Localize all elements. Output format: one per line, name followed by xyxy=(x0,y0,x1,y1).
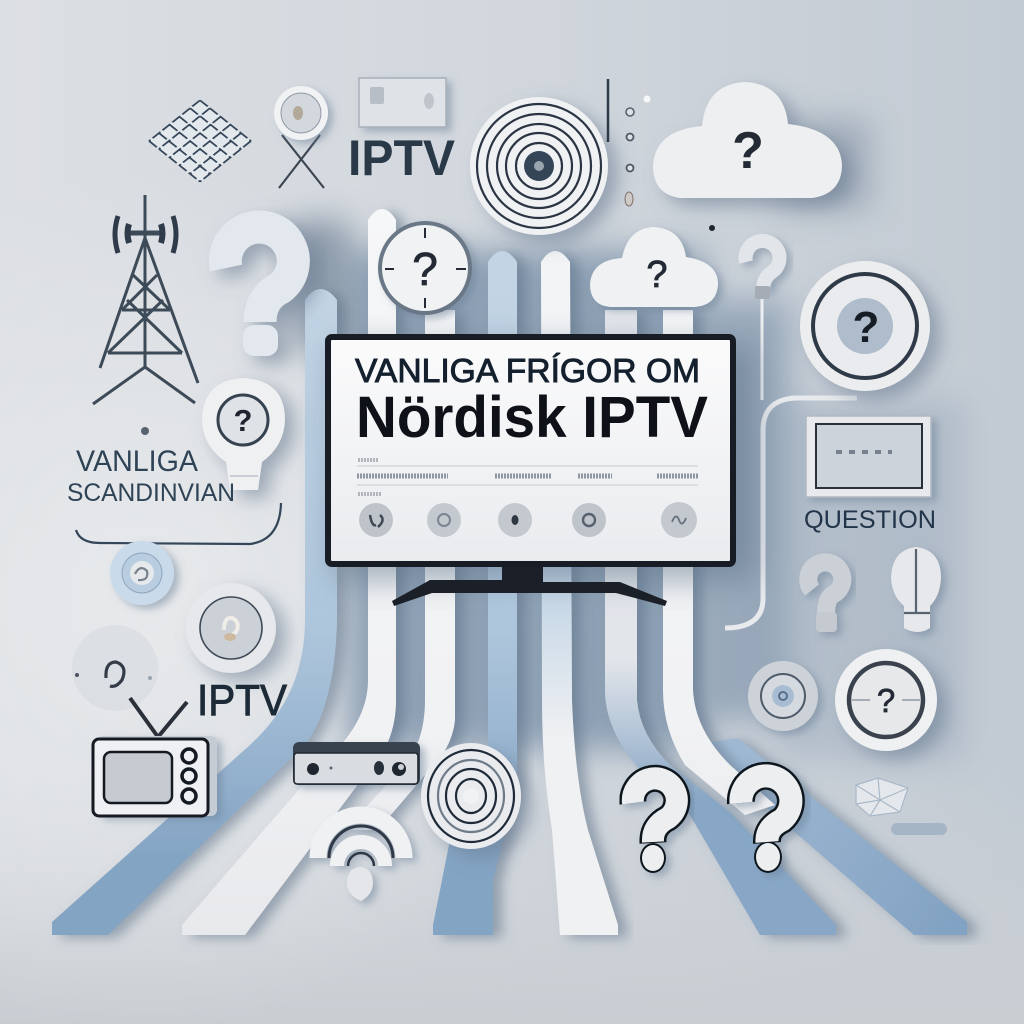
info rows xyxy=(357,460,698,494)
ribbon: white second xyxy=(182,209,396,935)
icon: clock with question xyxy=(380,223,470,313)
label: question: QUESTION xyxy=(804,506,936,534)
icon: big question mark xyxy=(225,227,293,356)
icon: big cloud with question mark: ? xyxy=(732,122,764,180)
icon: ring question: ? xyxy=(877,682,895,719)
icon: small cloud with question mark: ? xyxy=(646,254,668,296)
shadow smudge xyxy=(891,823,947,835)
icon: radio tower xyxy=(93,195,198,435)
icon: concentric target xyxy=(470,97,608,235)
title line 1: VANLIGA FRÍGOR OM xyxy=(355,352,700,389)
icon: grey dial xyxy=(186,583,276,673)
icon: wifi xyxy=(318,815,404,901)
icon: retro TV xyxy=(93,698,217,816)
label: IPTV top: IPTV xyxy=(348,130,456,186)
icon: crumpled mesh xyxy=(856,778,908,816)
label: Vanliga Scandinavian: VANLIGA xyxy=(76,445,198,478)
ribbon: centre blue xyxy=(433,251,517,935)
icon: spiral disc xyxy=(748,661,818,731)
icon: dots and antenna line xyxy=(608,79,715,231)
icon: cables xyxy=(725,298,857,628)
monitor frame xyxy=(328,337,733,564)
icon: big cloud with question mark xyxy=(653,82,842,198)
icon: question mark bottom B xyxy=(741,776,791,873)
icon: question mark bottom A xyxy=(633,778,677,873)
monitor shadow xyxy=(335,345,755,580)
bracket line xyxy=(76,503,281,544)
icon: bulb right xyxy=(891,547,941,632)
ribbon: far right white xyxy=(663,310,775,815)
icon: clock with question: ? xyxy=(412,243,438,295)
icon: diamond mesh xyxy=(149,100,251,182)
icon: target ring right xyxy=(800,261,930,391)
icon: small question hook xyxy=(745,241,779,299)
ribbons flowing to the floor xyxy=(52,209,967,935)
icon: button disc xyxy=(110,541,174,605)
icon: lightbulb question: ? xyxy=(234,403,252,438)
icon: question pin right xyxy=(808,562,842,632)
ribbon: far right blue xyxy=(700,738,967,935)
ribbon: white third xyxy=(345,310,455,830)
monitor stand xyxy=(392,562,667,606)
icon: lightbulb question xyxy=(202,378,285,490)
icon: pin with crossed legs xyxy=(274,86,328,188)
icon: framed card right xyxy=(806,416,931,497)
icon: small cloud with question mark xyxy=(590,227,718,307)
soft shadows behind the ribbons xyxy=(290,120,965,760)
label: Vanliga Scandinavian: SCANDINVIAN xyxy=(67,479,235,507)
icon: set top box xyxy=(293,742,420,785)
ribbon: centre right white xyxy=(541,251,618,935)
icon: flat disc with ear xyxy=(72,625,158,711)
icon: small card top xyxy=(359,78,446,127)
ribbon: left blue xyxy=(52,289,337,935)
label: IPTV left: IPTV xyxy=(197,676,288,725)
ribbon: right blue xyxy=(605,310,836,935)
icon: ring question xyxy=(835,649,937,751)
button row xyxy=(359,502,697,538)
icon: concentric target bottom xyxy=(421,743,521,849)
label: Vanliga Scandinavian xyxy=(67,445,235,507)
icon: target ring right: ? xyxy=(853,303,879,352)
TV monitor with title xyxy=(328,337,755,606)
title line 2: Nördisk IPTV xyxy=(356,385,708,450)
